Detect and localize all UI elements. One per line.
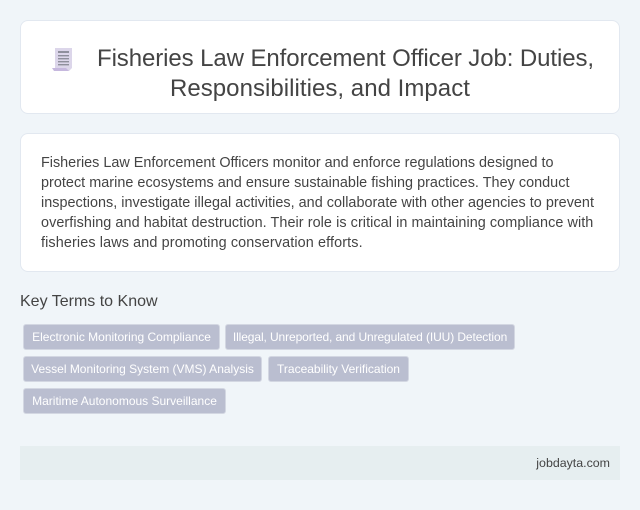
tag: VMS analysis: Vessel Monitoring System (VMS) Analysis [31, 362, 254, 376]
title [97, 45, 594, 102]
title: Fisheries Law Enforcement Officer Job: Duties, [97, 45, 594, 72]
text block: description: overfishing and habitat destruction. Their role is critical in maintaining compliance with [41, 215, 593, 231]
panel: title card [20, 20, 620, 114]
text block: description: Fisheries Law Enforcement Officers monitor and enforce regulations designed to [41, 155, 553, 171]
title: Responsibilities, and Impact [170, 75, 470, 102]
text block: description: inspections, investigate illegal activities, and collaborate with other agencies to prevent [41, 195, 594, 211]
tag: IUU detection: Illegal, Unreported, and Unregulated (IUU) Detection [233, 330, 507, 344]
tag: VMS analysis [23, 356, 262, 382]
text block: description: protect marine ecosystems and ensure sustainable fishing practices. They conduct [41, 175, 569, 191]
heading: key terms: Key Terms to Know [20, 293, 158, 310]
text block: description: fisheries laws and promoting conservation efforts. [41, 235, 363, 251]
panel: key term tags [23, 324, 515, 414]
tag: traceability verification [268, 356, 409, 382]
text block: description [41, 155, 594, 251]
tag: maritime autonomous surveillance [23, 388, 226, 414]
tag: electronic monitoring compliance [23, 324, 220, 350]
tag: traceability verification: Traceability Verification [277, 362, 400, 376]
footer bar [20, 446, 620, 480]
tag: maritime autonomous surveillance: Maritime Autonomous Surveillance [32, 394, 217, 408]
tag: electronic monitoring compliance: Electronic Monitoring Compliance [32, 330, 211, 344]
icon: document [52, 48, 72, 71]
tag: IUU detection [225, 324, 515, 350]
footer source: jobdayta.com [536, 456, 610, 470]
panel: description card [20, 133, 620, 272]
